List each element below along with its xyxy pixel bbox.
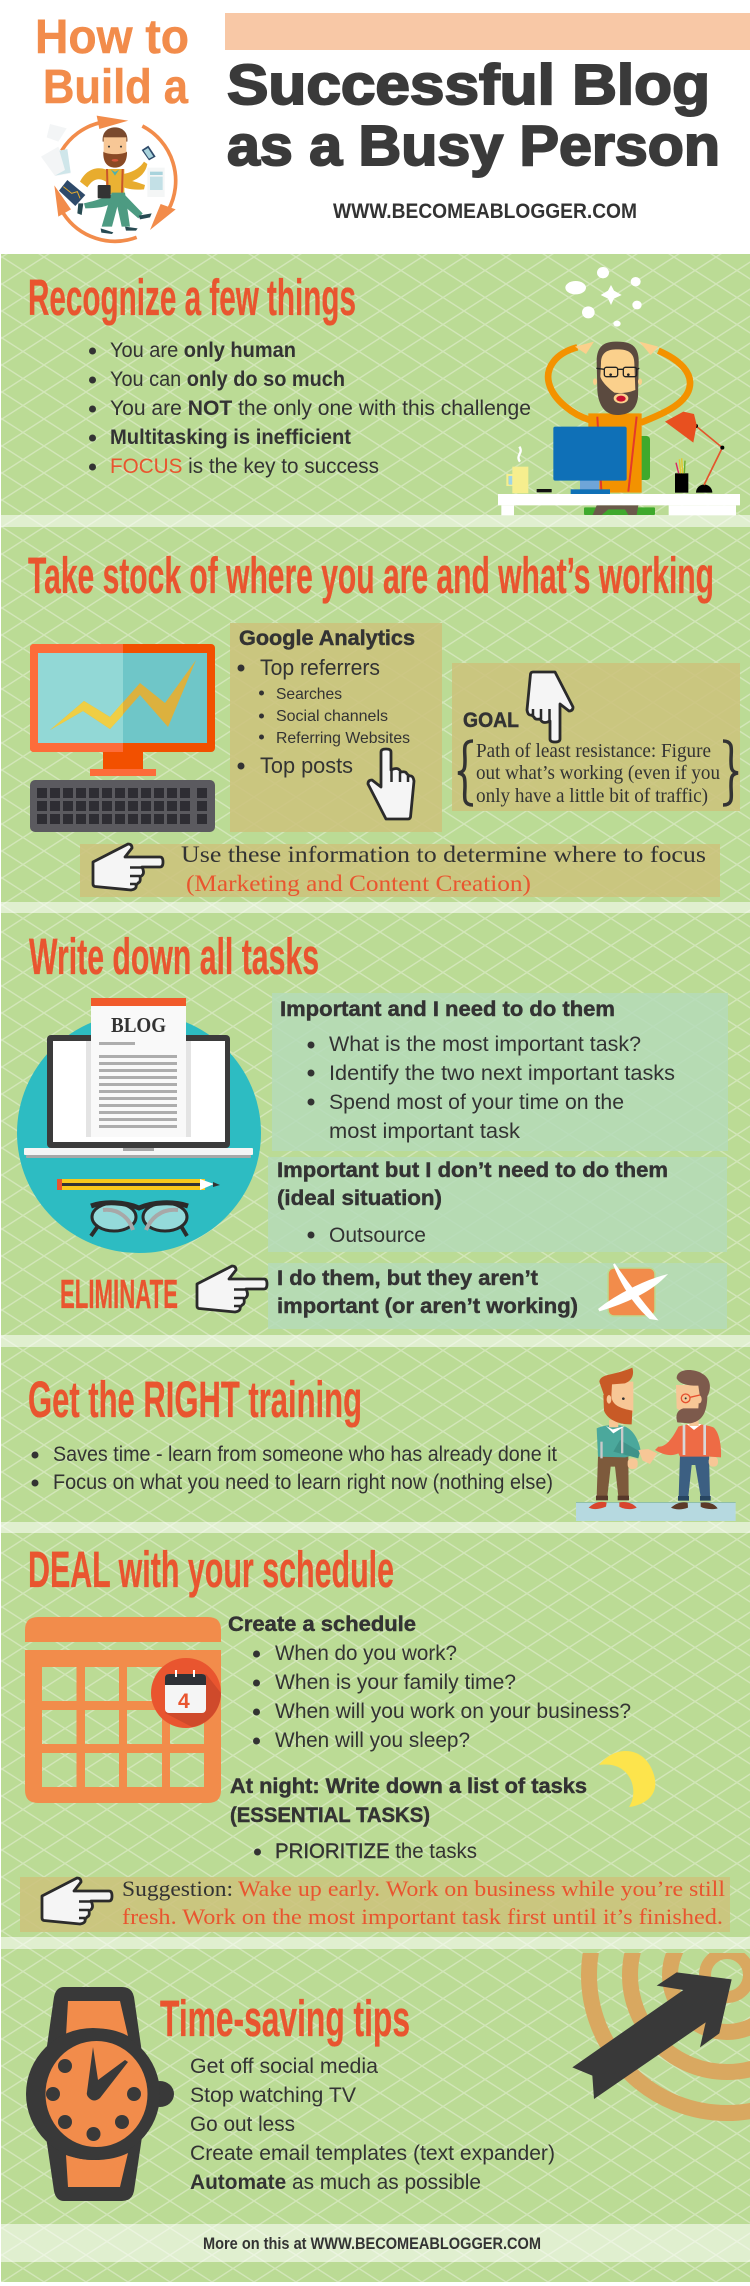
- peach title bar: [225, 13, 750, 50]
- callout: google analytics: Top referrers: [260, 655, 380, 680]
- header: [35, 11, 750, 241]
- icon: date badge: 4: [178, 1690, 190, 1713]
- heading: Recognize a few things: [28, 269, 356, 326]
- schedule questions: When is your family time?: [275, 1671, 516, 1694]
- heading: Time-saving tips: [160, 1990, 410, 2047]
- schedule questions: [228, 1613, 631, 1752]
- illustration: laptop with blog post: [17, 998, 261, 1253]
- callout: where to focus: [80, 842, 720, 897]
- callout: where to focus: (Marketing and Content Creation): [186, 871, 531, 896]
- callout: goal: Path of least resistance: Figure: [476, 740, 711, 762]
- panel: write down all tasks: [17, 928, 728, 1329]
- bullet list: [32, 1443, 557, 1494]
- callout: important and i need to do them: Identify the two next important tasks: [329, 1062, 675, 1085]
- icon: calendar: [25, 1617, 221, 1803]
- panel: recognize a few things: [28, 267, 740, 515]
- bullet list: You can only do so much: [110, 368, 345, 391]
- panel: deal with your schedule: [20, 1541, 730, 1932]
- callout: goal: out what’s working (even if you: [476, 762, 720, 784]
- callout: important and i need to do them: [272, 993, 728, 1151]
- bullet list: [89, 339, 531, 478]
- bullet list: You are NOT the only one with this challenge: [110, 397, 531, 420]
- bullet list: Saves time - learn from someone who has already done it: [53, 1443, 557, 1466]
- callout: suggestion: Suggestion:: [122, 1876, 233, 1901]
- callout: eliminate: important (or aren’t working): [277, 1295, 578, 1318]
- tips list: Get off social media: [190, 2055, 378, 2078]
- callout: google analytics: Google Analytics: [239, 627, 415, 650]
- callout: google analytics: [230, 623, 442, 832]
- icon: crossed-out square: [599, 1264, 663, 1319]
- at night text: PRIORITIZE the tasks: [275, 1840, 477, 1863]
- website url: WWW.BECOMEABLOGGER.COM: [333, 200, 637, 223]
- callout: suggestion: [20, 1876, 730, 1932]
- callout: important but i don't need to do them: Outsource: [329, 1224, 426, 1247]
- title: as a busy person: as a Busy Person: [227, 114, 720, 178]
- bullet list: Focus on what you need to learn right now (nothing else): [53, 1471, 553, 1494]
- callout: eliminate: I do them, but they aren’t: [277, 1267, 538, 1290]
- tips list: Stop watching TV: [190, 2084, 356, 2107]
- callout: eliminate: ELIMINATE: [60, 1271, 178, 1317]
- icon: pointing hand: [93, 844, 163, 890]
- title: successful blog: Successful Blog: [227, 53, 710, 117]
- callout: important but i don't need to do them: Important but I don’t need to do them: [277, 1159, 668, 1182]
- icon: date badge: [151, 1658, 221, 1728]
- icon: busy multitasking man: [41, 116, 176, 241]
- callout: important but i don't need to do them: (ideal situation): [277, 1187, 442, 1210]
- icon: wristwatch: [26, 1987, 174, 2201]
- tips list: Create email templates (text expander): [190, 2142, 555, 2165]
- icon: pointing hand: [197, 1266, 267, 1312]
- tips list: Go out less: [190, 2113, 295, 2136]
- icon: hand pointing up: [368, 749, 414, 819]
- tips list: [190, 2055, 555, 2194]
- icon: hand pointing down: [527, 672, 573, 742]
- callout: important but i don't need to do them: [268, 1157, 727, 1252]
- callout: important and i need to do them: Important and I need to do them: [280, 998, 615, 1021]
- schedule questions: Create a schedule: [228, 1613, 416, 1636]
- section divider bands: [0, 515, 750, 2262]
- heading: Write down all tasks: [29, 928, 319, 985]
- callout: google analytics: Top posts: [260, 753, 353, 778]
- callout: google analytics: Social channels: [276, 708, 388, 725]
- illustration: laptop with blog post: BLOG: [111, 1013, 166, 1037]
- bullet list: You are only human: [110, 339, 296, 362]
- tips list: Automate as much as possible: [190, 2171, 481, 2194]
- callout: google analytics: Searches: [276, 686, 342, 703]
- callout: suggestion: Wake up early. Work on business while you’re still: [238, 1876, 725, 1901]
- icon: desktop computer: [30, 644, 215, 832]
- callout: google analytics: Referring Websites: [276, 730, 410, 747]
- bullet list: Multitasking is inefficient: [110, 426, 351, 449]
- callout: where to focus: Use these information to determine where to focus: [181, 842, 706, 867]
- icon: pointing hand: [42, 1878, 112, 1924]
- at night text: (ESSENTIAL TASKS): [230, 1804, 430, 1827]
- callout: important and i need to do them: What is the most important task?: [329, 1033, 641, 1056]
- heading: Get the RIGHT training: [28, 1371, 362, 1428]
- icon: moon: [599, 1751, 655, 1807]
- title: build a: Build a: [43, 61, 188, 114]
- bullet list: FOCUS is the key to success: [110, 455, 379, 478]
- footer text: More on this at WWW.BECOMEABLOGGER.COM: [203, 2234, 541, 2253]
- callout: important and i need to do them: most important task: [329, 1120, 521, 1143]
- schedule questions: When will you work on your business?: [275, 1700, 631, 1723]
- title: how to: How to: [35, 11, 189, 64]
- illustration: stressed man at desk: [498, 267, 740, 515]
- callout: goal: [452, 663, 740, 811]
- panel: time-saving tips: [26, 1953, 750, 2201]
- icon: glasses: [91, 1203, 188, 1236]
- icon: concentric rings: [581, 1953, 750, 2121]
- at night text: At night: Write down a list of tasks: [230, 1775, 587, 1798]
- callout: suggestion: fresh. Work on the most important task first until it’s finished.: [122, 1904, 723, 1929]
- icon: pencil: [57, 1179, 220, 1190]
- callout: goal: GOAL: [463, 709, 519, 732]
- arrow: [572, 1972, 732, 2099]
- at night text: [230, 1775, 587, 1863]
- schedule questions: When will you sleep?: [275, 1729, 470, 1752]
- schedule questions: When do you work?: [275, 1642, 457, 1665]
- panel: get the right training: [28, 1368, 736, 1521]
- callout: important and i need to do them: Spend most of your time on the: [329, 1091, 624, 1114]
- heading: DEAL with your schedule: [28, 1541, 394, 1598]
- panel: take stock: [28, 547, 740, 897]
- illustration: two men shaking hands: [576, 1368, 736, 1521]
- callout: eliminate: [60, 1263, 727, 1329]
- callout: goal: only have a little bit of traffic): [476, 785, 708, 807]
